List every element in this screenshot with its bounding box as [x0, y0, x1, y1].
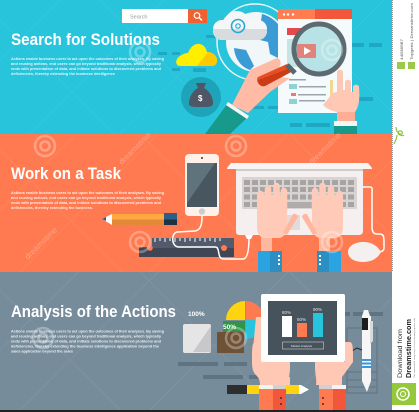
icon: money bag — [181, 77, 221, 117]
icon: 100% cylinder: 100% — [188, 311, 205, 318]
icon: left hand typing — [257, 186, 298, 272]
text block: Actions enable business users to act upon the outcomes of their analyses. By saving — [11, 330, 164, 334]
text block: ends with presentation of data, and initiate solutions to discovered problems and — [11, 67, 161, 71]
icon: right hand — [323, 70, 359, 134]
text block: ends with presentation of data, and initiate solutions to discovered problems and — [11, 340, 161, 344]
text block: deficiencies, thereby extending the business intelligence — [11, 72, 115, 76]
sidebar: image id and author — [397, 3, 415, 69]
title: Work on a Task — [11, 165, 122, 183]
watermark text: dreamstime — [117, 130, 153, 166]
sidebar: download credit: Dreamstime.com — [404, 319, 413, 378]
watermark spirals — [33, 328, 246, 348]
icon: tablet and hands: Market Analysis — [291, 344, 313, 348]
icon: yellow cloud — [176, 44, 217, 66]
search box: Search — [130, 14, 147, 20]
icon: 50% block — [217, 324, 244, 353]
title: Search for Solutions — [11, 31, 160, 49]
search box — [122, 9, 207, 23]
icon: ruler — [139, 238, 234, 257]
sidebar: leaf — [394, 127, 404, 144]
bottom strip — [0, 410, 419, 412]
icon: tablet and hands — [252, 294, 353, 385]
icon: globe — [217, 4, 293, 80]
panel: search — [0, 0, 392, 134]
text block — [11, 191, 164, 210]
icon: 100% cylinder — [183, 311, 211, 353]
text block — [11, 330, 164, 354]
text block — [11, 57, 164, 76]
sidebar: download credit: This watermarked comp image is for previewing purposes only — [413, 317, 416, 378]
watermark text: dreamstime — [307, 130, 343, 166]
sidebar: download credit — [392, 0, 419, 410]
text block: Actions enable business users to act upon the outcomes of their analyses. By saving — [11, 191, 164, 195]
text block: and reusing actions, end users can go beyond traditional analysis, which typically — [11, 334, 161, 338]
browser window — [278, 9, 352, 113]
icon: phone — [185, 154, 219, 216]
icon: tablet and hands: 90% — [313, 307, 322, 312]
sidebar: download credit: Download from — [397, 329, 404, 378]
text block: and reusing actions, end users can go beyond traditional analysis, which typically — [11, 62, 161, 66]
watermark spirals — [130, 40, 342, 62]
icon: pie chart — [223, 301, 264, 339]
panel: analysis — [0, 272, 392, 410]
icon: right hand typing — [302, 186, 343, 272]
text block: deficiencies, thereby extending the business intelligence application beyond the — [11, 344, 159, 348]
icon: email cloud — [213, 11, 267, 40]
text block: Actions enable business users to act upon the outcomes of their analyses. By saving — [11, 57, 164, 61]
watermark text — [23, 130, 343, 261]
title: Analysis of the Actions — [11, 303, 176, 321]
cables — [173, 187, 384, 259]
watermark text: dreamstime — [23, 225, 59, 261]
watermark spirals — [35, 136, 342, 252]
icon: pen — [362, 310, 373, 392]
panel: task — [0, 130, 392, 272]
text block: deficiencies, thereby extending the business. — [11, 206, 93, 210]
icon: left hand holding magnifier — [205, 58, 290, 134]
icon: 50% block: 50% — [223, 324, 236, 331]
icon: pencil — [102, 213, 177, 225]
icon: tablet and hands: 80% — [282, 310, 291, 315]
icon: magnifying glass — [257, 24, 344, 86]
icon: laptop — [227, 163, 372, 239]
sidebar: image id and author: 44836987 — [400, 39, 404, 60]
document behind tablet — [347, 328, 377, 393]
icon: mouse — [348, 242, 381, 262]
text block: sales application beyond the sales — [11, 350, 73, 354]
icon: bottom pencil — [227, 385, 309, 394]
sidebar: image id and author: Topgeek | Dreamstime.com — [410, 3, 414, 60]
icon: cuffs — [259, 385, 346, 410]
icon: money bag: $ — [198, 94, 203, 103]
text block: ends with presentation of data, and initiate solutions to discovered problems and — [11, 201, 161, 205]
text block: and reusing actions, end users can go beyond traditional analysis, which typically — [11, 196, 161, 200]
icon: tablet and hands: 50% — [297, 317, 306, 322]
